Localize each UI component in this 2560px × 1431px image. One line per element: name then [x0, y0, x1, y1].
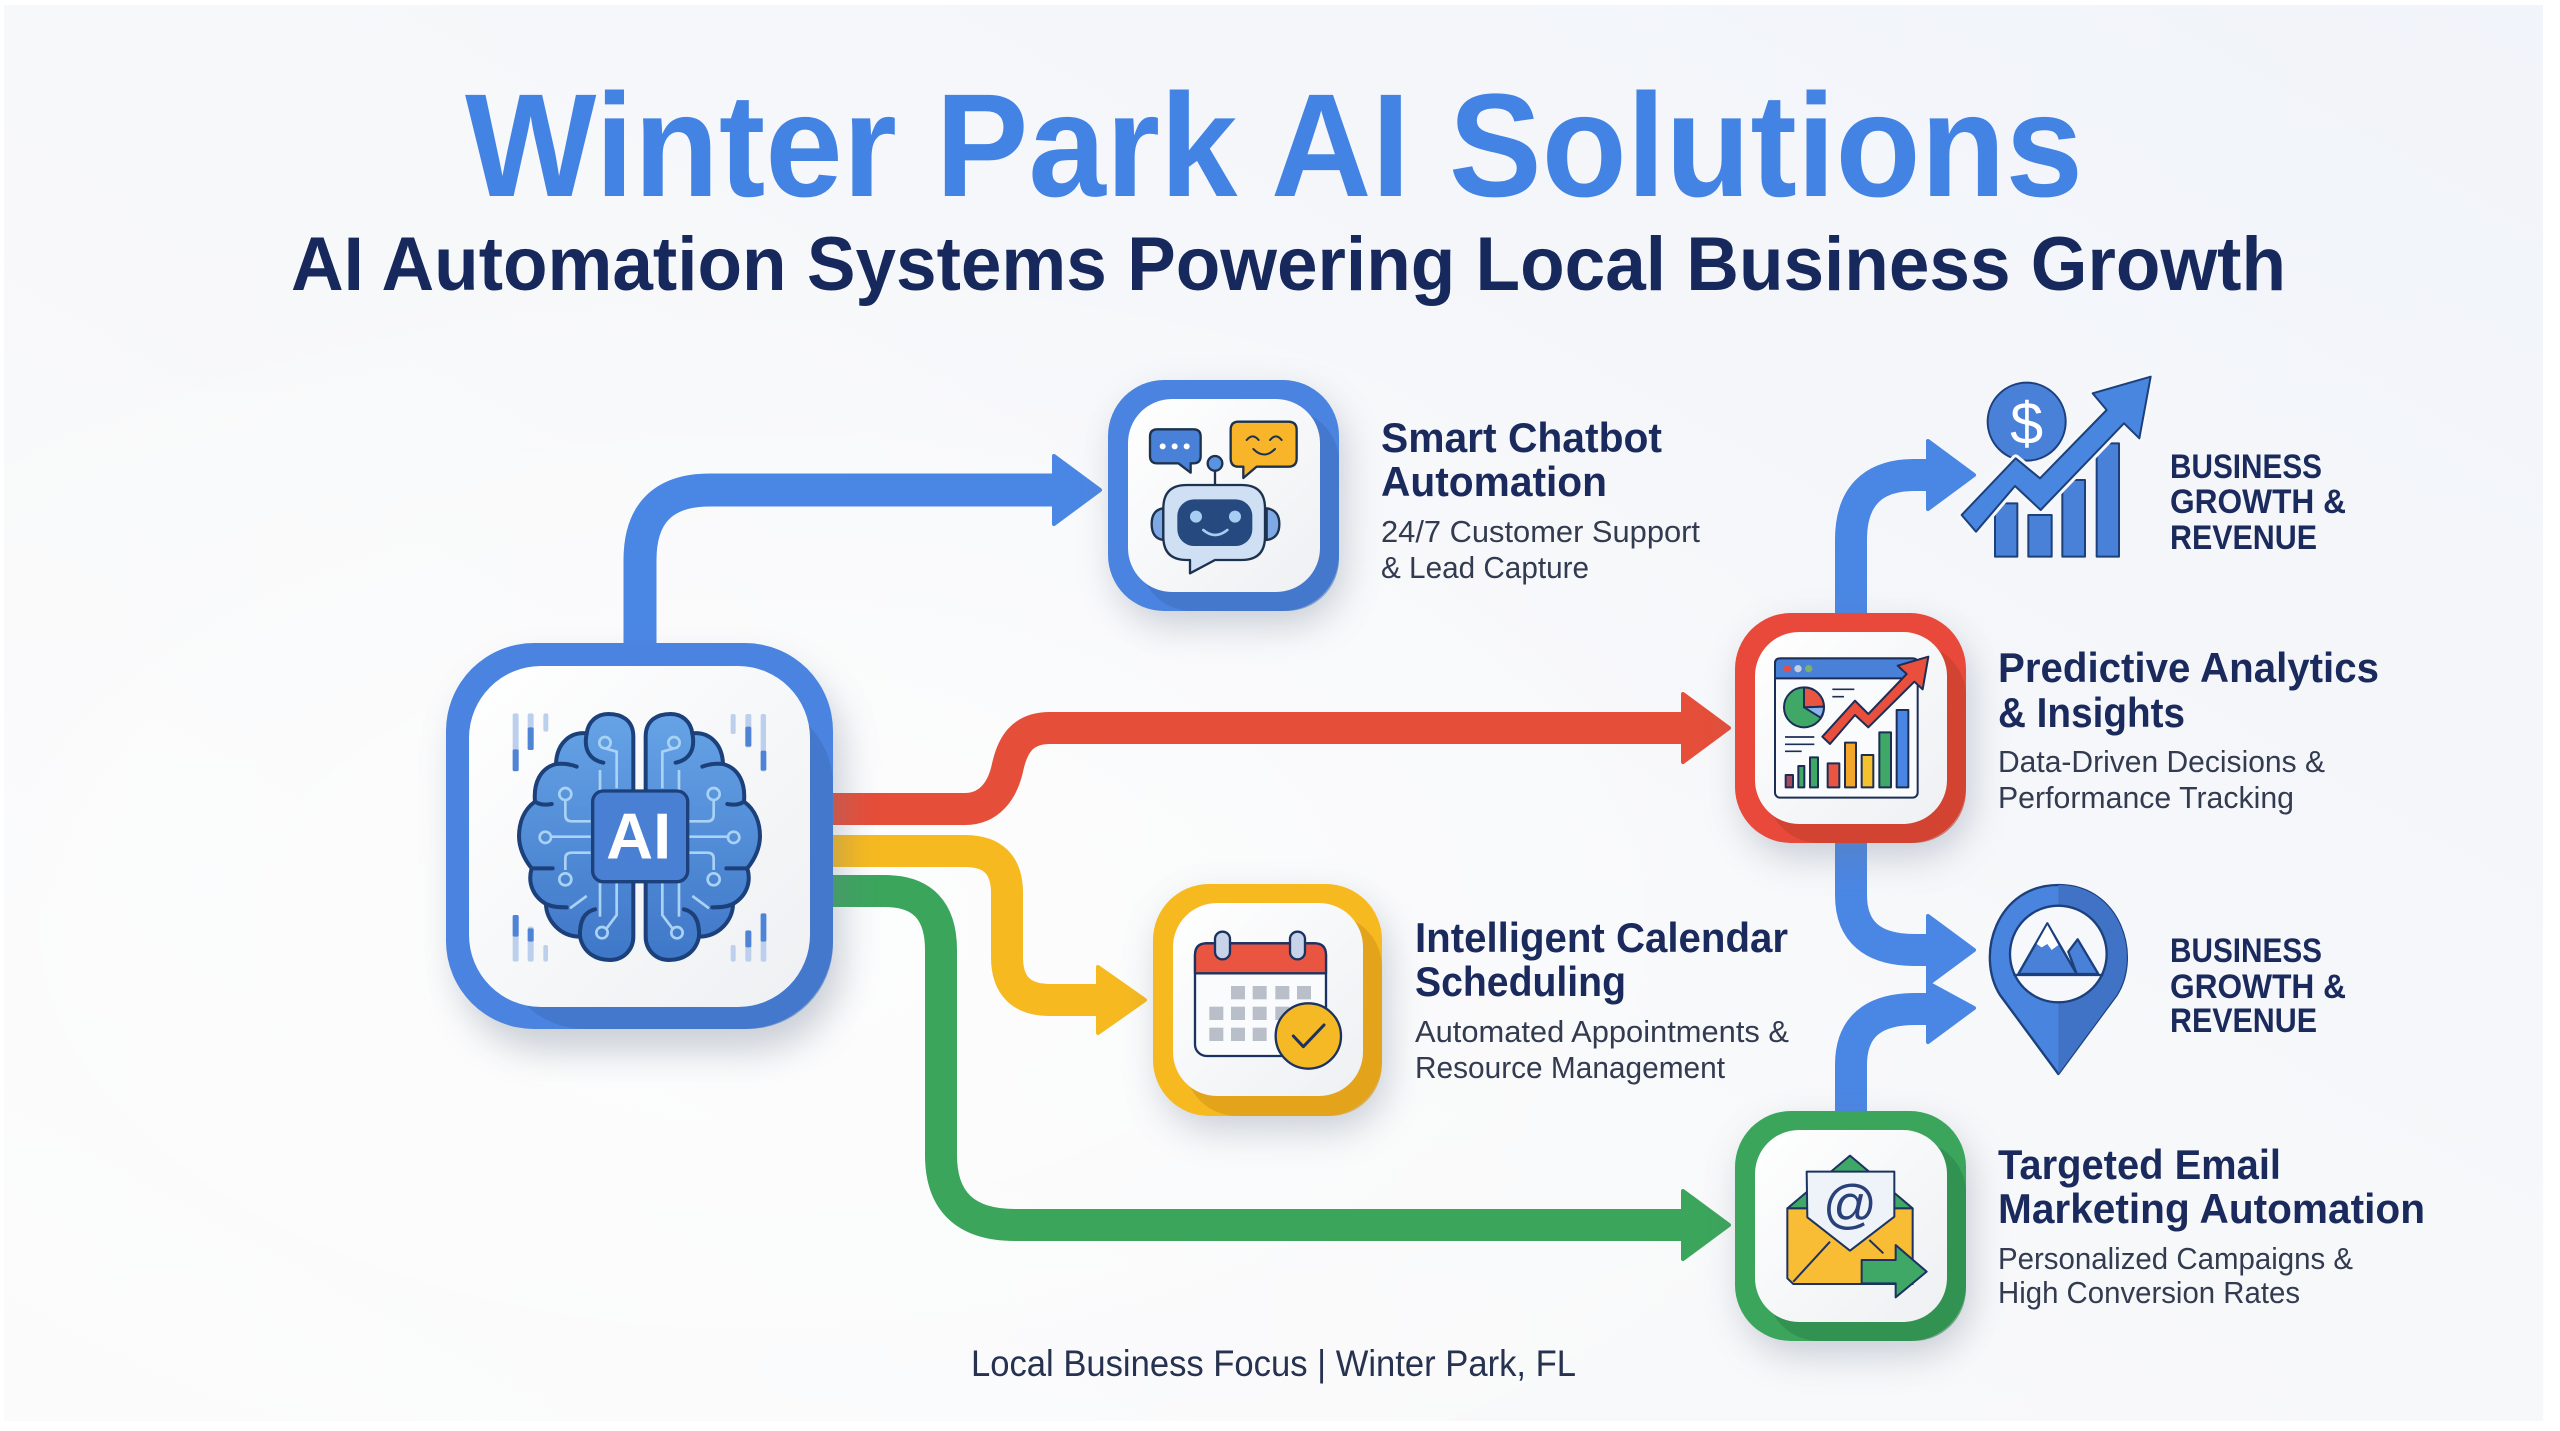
arrow: AI to email marketing	[825, 891, 1729, 1259]
data bars decoration	[513, 713, 766, 962]
text: email marketing: Marketing Automation	[1998, 1185, 2425, 1232]
text: business growth and revenue bottom	[2170, 932, 2346, 1040]
text: calendar scheduling: Intelligent Calendar	[1415, 914, 1788, 961]
text: business growth and revenue bottom: GROWTH &	[2170, 968, 2346, 1006]
panel: smart chatbot	[1108, 380, 1345, 626]
icon: AI brain: AI	[606, 800, 671, 873]
text: calendar scheduling: Scheduling	[1415, 958, 1626, 1005]
text: predictive analytics: Data-Driven Decisions &	[1998, 744, 2325, 779]
text: predictive analytics: Predictive Analytics	[1998, 644, 2379, 691]
icon: growth and revenue chart	[1962, 377, 2151, 557]
text: calendar scheduling: Automated Appointments &	[1415, 1014, 1789, 1049]
AI chip	[593, 791, 688, 882]
icon: email envelope: @	[1823, 1176, 1877, 1235]
text: business growth and revenue top: REVENUE	[2170, 519, 2317, 557]
text: email marketing	[1998, 1141, 2425, 1310]
text: business growth and revenue top	[2170, 448, 2346, 557]
text: predictive analytics: & Insights	[1998, 689, 2185, 736]
text: business growth and revenue top: BUSINESS	[2170, 448, 2322, 486]
text: smart chatbot: 24/7 Customer Support	[1381, 514, 1700, 549]
icon: chatbot	[1150, 422, 1297, 573]
text: email marketing: High Conversion Rates	[1998, 1275, 2300, 1310]
text: predictive analytics: Performance Tracking	[1998, 780, 2294, 815]
arrow: analytics to growth	[1851, 441, 1974, 625]
arrow: AI to chatbot	[640, 456, 1100, 660]
arrow: email to location	[1851, 983, 1974, 1120]
text: smart chatbot	[1381, 414, 1700, 585]
icon: analytics dashboard	[1775, 657, 1928, 798]
panel: predictive analytics	[1735, 613, 1972, 858]
icon: AI brain	[513, 713, 766, 962]
text: business growth and revenue bottom: BUSINESS	[2170, 932, 2322, 970]
text: smart chatbot: & Lead Capture	[1381, 550, 1589, 585]
arrow: AI to predictive analytics	[825, 694, 1729, 809]
footer: Local Business Focus | Winter Park, FL	[971, 1343, 1576, 1384]
title: Winter Park AI Solutions	[465, 64, 2083, 228]
icon: email envelope	[1787, 1156, 1927, 1297]
text: calendar scheduling	[1415, 914, 1789, 1085]
text: predictive analytics	[1998, 644, 2379, 815]
text: business growth and revenue bottom: REVENUE	[2170, 1002, 2317, 1040]
subtitle: AI Automation Systems Powering Local Business Growth	[291, 222, 2286, 307]
arrow: analytics to location	[1851, 830, 1974, 984]
text: email marketing: Targeted Email	[1998, 1141, 2281, 1188]
text: business growth and revenue top: GROWTH &	[2170, 483, 2346, 521]
icon: growth and revenue chart: $	[2010, 389, 2043, 456]
icon: calendar	[1195, 932, 1341, 1069]
icon: location pin	[1990, 885, 2127, 1074]
text: smart chatbot: Smart Chatbot	[1381, 414, 1662, 461]
arrow: AI to calendar	[825, 851, 1145, 1033]
panel: AI hub	[446, 643, 843, 1051]
text: email marketing: Personalized Campaigns &	[1998, 1241, 2353, 1276]
left hemisphere	[519, 714, 633, 960]
text: smart chatbot: Automation	[1381, 458, 1607, 505]
panel: calendar scheduling	[1153, 884, 1388, 1131]
panel: email marketing	[1735, 1111, 1972, 1356]
text: calendar scheduling: Resource Management	[1415, 1050, 1725, 1085]
